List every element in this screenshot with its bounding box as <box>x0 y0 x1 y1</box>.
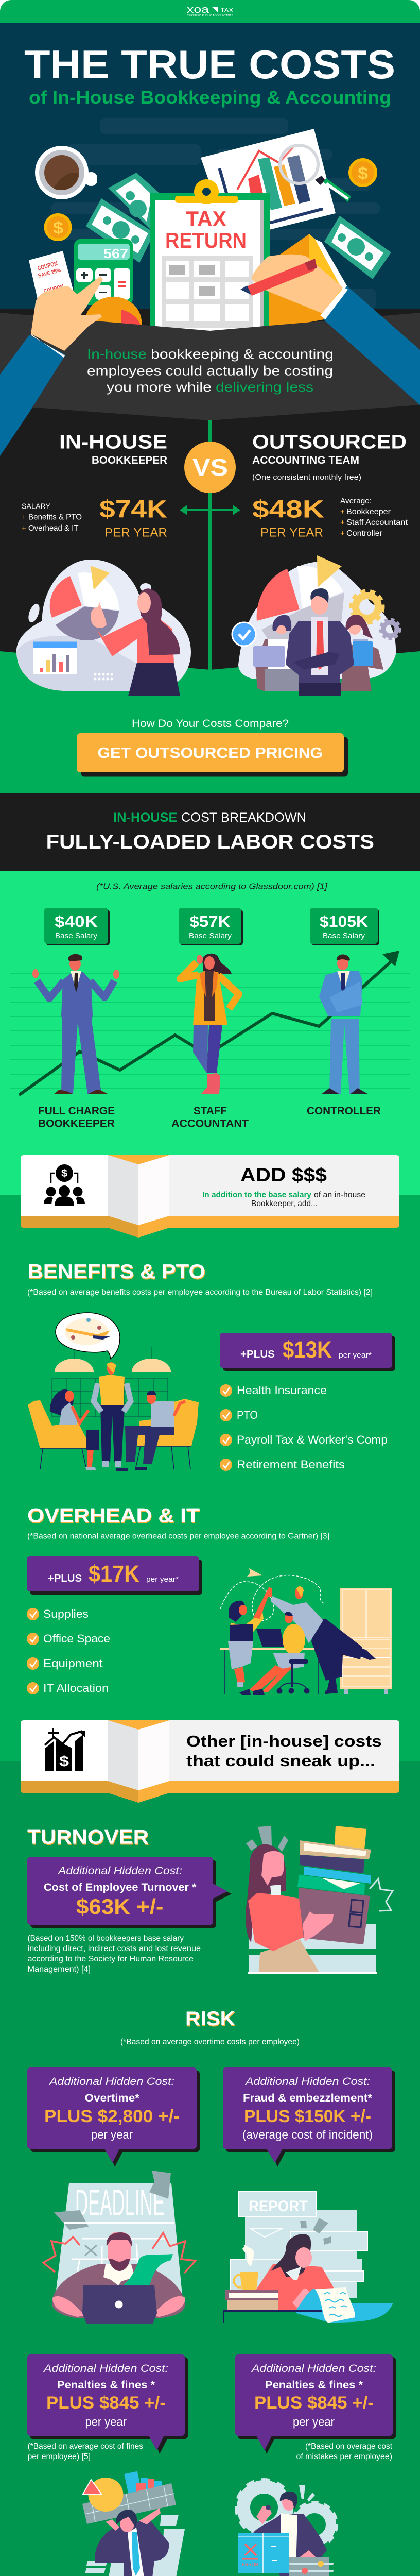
clipboard: tax return form: RETURN <box>165 228 247 252</box>
coupons <box>29 251 74 299</box>
callout: fraud and embezzlement: Additional Hidden Cost: <box>244 2076 370 2088</box>
benefits checklist: Payroll Tax & Worker's Comp <box>237 1433 388 1446</box>
section heading: labor costs: IN-HOUSE <box>113 810 177 825</box>
role labels: CONTROLLER <box>307 1105 381 1117</box>
call to action: How Do Your Costs Compare? <box>132 718 289 730</box>
section heading: labor costs <box>46 810 374 853</box>
callout: overtime: Overtime* <box>84 2092 140 2104</box>
penalties source notes: (*Based on overage cost <box>305 2442 393 2451</box>
section heading: labor costs: FULLY-LOADED LABOR COSTS <box>46 831 374 853</box>
icon: salary going to staff: $ <box>61 1168 67 1179</box>
illustration: in-house bookkeeper at pie chart <box>16 560 191 696</box>
callout: fraud and embezzlement: PLUS $150K +/- <box>244 2107 371 2126</box>
callout: overtime: PLUS $2,800 +/- <box>44 2107 180 2126</box>
callout: cost of employee turnover: $63K +/- <box>76 1894 164 1919</box>
in-house column text: BOOKKEEPER <box>92 454 167 466</box>
figure: staff accountant <box>180 954 239 1094</box>
hero intro text: In-house <box>87 346 147 362</box>
calculator <box>74 239 133 305</box>
heading: benefits and PTO <box>27 1261 373 1297</box>
turnover source note: according to the Society for Human Resource <box>28 1955 194 1963</box>
salary card: controller <box>310 908 379 945</box>
hero illustration: desk with tax return <box>29 118 391 332</box>
callout: cost of employee turnover: Cost of Employee Turnover * <box>44 1882 197 1893</box>
purple cost box: plus $17K <box>27 1556 202 1595</box>
ribbon banner: add $$$: In addition to the base salary <box>202 1191 311 1199</box>
callout: fraud and embezzlement: (average cost of incident) <box>242 2128 373 2141</box>
turnover source note <box>28 1934 201 1974</box>
salary card: full charge bookkeeper: $40K <box>55 912 98 930</box>
purple cost box: plus $13K: $13K <box>283 1336 332 1363</box>
role labels <box>38 1105 381 1129</box>
ribbon banner: other in-house costs <box>21 1720 399 1803</box>
role labels: ACCOUNTANT <box>171 1118 249 1129</box>
penalties source notes: of mistakes per employee) <box>296 2452 392 2461</box>
desk surface <box>0 313 420 420</box>
outsourced column text: (One consistent monthly free) <box>252 473 361 482</box>
overhead checklist: Office Space <box>43 1632 110 1645</box>
illustration: overloaded employee carrying boxes <box>246 1826 393 1974</box>
callout: penalties and fines right: Additional Hidden Cost: <box>251 2363 376 2375</box>
callout: cost of employee turnover <box>27 1857 232 1928</box>
hero intro text: employees could actually be costing <box>87 363 333 378</box>
callout: overtime <box>27 2067 200 2167</box>
outsourced column text: Controller <box>346 529 382 538</box>
salary card: controller: $105K <box>320 912 369 930</box>
heading: risk: RISK <box>185 2008 235 2030</box>
callout: penalties and fines right: per year <box>293 2415 335 2429</box>
icon: coffee cup <box>35 146 97 199</box>
header logo: TAX <box>221 7 233 14</box>
callout: penalties and fines left: per year <box>85 2415 127 2429</box>
callout: penalties and fines left: Additional Hidden Cost: <box>43 2363 168 2375</box>
illustration: man fixing errors <box>237 2481 336 2576</box>
outsourced column text: OUTSOURCED <box>252 432 407 453</box>
heading: turnover: TURNOVER <box>27 1826 149 1849</box>
outsourced column text: ACCOUNTING TEAM <box>252 454 359 466</box>
purple cost box: plus $17K: +PLUS <box>48 1573 82 1584</box>
overhead checklist: Supplies <box>43 1607 89 1620</box>
callout: fraud and embezzlement: Fraud & embezzlement* <box>243 2092 373 2104</box>
illustration: man fixing errors: ERROR <box>242 2562 258 2568</box>
in-house column text <box>22 432 167 540</box>
benefits checklist: Health Insurance <box>237 1384 327 1397</box>
icon: salary going to staff <box>44 1164 85 1206</box>
in-house column text: SALARY <box>22 502 50 511</box>
coupons: COUPON <box>43 283 64 295</box>
illustration: deadline stress: DEADLINE <box>75 2182 165 2224</box>
hero intro text: delivering less <box>216 379 313 395</box>
turnover source note: Management) [4] <box>28 1965 91 1974</box>
callout: penalties and fines right <box>235 2354 396 2454</box>
outsourced column text: PER YEAR <box>260 526 323 540</box>
header logo: CERTIFIED PUBLIC ACCOUNTANTS <box>187 14 233 18</box>
ribbon banner: add $$$: ADD $$$ <box>240 1164 327 1185</box>
growth line chart <box>10 951 410 1094</box>
penalties source notes: per employee) [5] <box>28 2452 91 2461</box>
calculator: 567 <box>103 246 128 261</box>
callout: penalties and fines left <box>27 2354 188 2454</box>
in-house column text: + <box>22 524 26 533</box>
ribbon banner: other in-house costs: Other [in-house] costs <box>186 1732 382 1750</box>
pie under desk and yellow folder <box>85 234 351 332</box>
callout: cost of employee turnover: Additional Hidden Cost: <box>57 1865 182 1877</box>
outsourced column text: + <box>340 518 345 527</box>
benefits checklist <box>220 1384 388 1471</box>
hands: left hand on calculator and right hand with pen <box>0 255 420 456</box>
comparison divider with VS badge: VS <box>192 454 228 481</box>
illustration: report woman: REPORT <box>249 2198 308 2215</box>
in-house column text: $74K <box>99 496 167 523</box>
benefits checklist: Retirement Benefits <box>237 1458 345 1471</box>
purple cost box: plus $13K: per year* <box>339 1351 372 1360</box>
callout: penalties and fines right: Penalties & fines * <box>265 2379 363 2391</box>
icon: dollar bills <box>86 173 391 279</box>
heading: benefits and PTO: BENEFITS & PTO <box>28 1261 205 1283</box>
outsourced column text: Bookkeeper <box>346 507 391 516</box>
ribbon banner: other in-house costs: that could sneak up... <box>186 1752 375 1770</box>
heading: overhead and IT <box>27 1504 329 1541</box>
benefits checklist: PTO <box>237 1409 258 1421</box>
figure: full charge bookkeeper <box>32 954 119 1094</box>
hero intro text: you more while <box>107 379 212 395</box>
section heading: labor costs: COST BREAKDOWN <box>181 810 306 825</box>
header logo <box>187 4 233 18</box>
salary card: controller: Base Salary <box>323 931 365 940</box>
overhead checklist: Equipment <box>43 1657 103 1670</box>
comparison divider with VS badge <box>180 420 240 670</box>
in-house column text: Overhead & IT <box>28 524 79 533</box>
in-house column text: IN-HOUSE <box>59 432 167 453</box>
title: of In-House Bookkeeping & Accounting <box>29 88 391 108</box>
outsourced column text <box>252 432 408 540</box>
purple cost box: plus $13K: +PLUS <box>240 1349 275 1360</box>
heading: risk <box>120 2008 300 2046</box>
illustration: coworkers dreaming of vacation <box>28 1313 199 1471</box>
icon: coins <box>44 158 377 241</box>
heading: risk: (*Based on average overtime costs per employee) <box>120 2038 300 2046</box>
salary card: staff accountant: $57K <box>189 912 231 930</box>
ribbon banner: add $$$: Bookkeeper, add... <box>251 1199 318 1208</box>
role labels: BOOKKEEPER <box>38 1118 115 1129</box>
ribbon banner: add $$$ <box>21 1155 399 1238</box>
illustration: office high five <box>220 1568 392 1695</box>
salary card: full charge bookkeeper: Base Salary <box>55 931 98 940</box>
in-house column text: Benefits & PTO <box>28 513 82 521</box>
callout: overtime: per year <box>91 2128 133 2141</box>
heading: benefits and PTO: (*Based on average benefits costs per employee according to the Bureau of Labor Statistics) [2] <box>27 1288 373 1297</box>
overhead checklist: IT Allocation <box>43 1682 109 1694</box>
purple cost box: plus $17K: per year* <box>146 1575 179 1584</box>
outsourced column text: Average: <box>340 497 372 505</box>
salary card: full charge bookkeeper <box>44 908 110 945</box>
salary source note: (*U.S. Average salaries according to Glassdoor.com) [1] <box>96 882 328 891</box>
callout: overtime: Additional Hidden Cost: <box>48 2076 174 2088</box>
in-house column text: + <box>22 513 26 521</box>
ribbon banner: add $$$: of an in-house <box>314 1191 365 1199</box>
outsourced column text: $48K <box>252 496 324 523</box>
figure: controller <box>319 954 369 1094</box>
icon: growing costs chart: $ <box>59 1753 69 1769</box>
callout: penalties and fines right: PLUS $845 +/- <box>254 2393 374 2413</box>
outsourced column text: Staff Accountant <box>346 518 408 527</box>
illustration: deadline stress <box>43 2171 196 2324</box>
illustration: report woman <box>223 2191 393 2323</box>
turnover source note: (Based on 150% ol bookkeepers base salary <box>28 1934 184 1943</box>
salary card: staff accountant: Base Salary <box>189 931 232 940</box>
callout: penalties and fines left: PLUS $845 +/- <box>46 2393 166 2413</box>
header logo: xoa <box>187 4 209 15</box>
illustration: man carrying fines charts <box>82 2471 185 2576</box>
hero intro text: bookkeeping & accounting <box>151 346 334 362</box>
chart paper with magnifier <box>201 129 351 230</box>
icon: growing costs chart <box>45 1728 85 1771</box>
turnover source note: including direct, indirect costs and lost revenue <box>28 1944 201 1953</box>
heading: overhead and IT: (*Based on national average overhead costs per employee according to Gartner) [3] <box>27 1532 329 1541</box>
callout: fraud and embezzlement <box>223 2067 395 2167</box>
penalties source notes <box>28 2442 393 2461</box>
outsourced column text: + <box>340 529 345 538</box>
clipboard: tax return form <box>150 179 270 332</box>
hero intro text <box>87 346 334 395</box>
penalties source notes: (*Based on average cost of fines <box>28 2442 143 2451</box>
outsourced column text: + <box>340 507 345 516</box>
icon: coins: $ <box>53 218 63 237</box>
clipboard: tax return form: TAX <box>186 207 226 231</box>
call to action: GET OUTSOURCED PRICING <box>98 745 323 761</box>
in-house column text: PER YEAR <box>104 526 167 540</box>
salary card: staff accountant <box>179 908 243 945</box>
illustration: outsourced accounting team <box>232 555 400 696</box>
role labels: FULL CHARGE <box>38 1105 115 1117</box>
heading: overhead and IT: OVERHEAD & IT <box>27 1504 200 1527</box>
callout: penalties and fines left: Penalties & fines * <box>57 2379 155 2391</box>
title <box>24 42 395 108</box>
icon: coins: $ <box>358 164 368 182</box>
purple cost box: plus $13K <box>220 1333 395 1371</box>
role labels: STAFF <box>194 1105 227 1117</box>
coupons: COUPON <box>37 260 58 272</box>
overhead checklist <box>27 1607 110 1694</box>
title: THE TRUE COSTS <box>24 42 395 87</box>
purple cost box: plus $17K: $17K <box>89 1561 139 1587</box>
call to action <box>77 718 348 777</box>
coupons: SAVE 25% <box>38 267 61 279</box>
